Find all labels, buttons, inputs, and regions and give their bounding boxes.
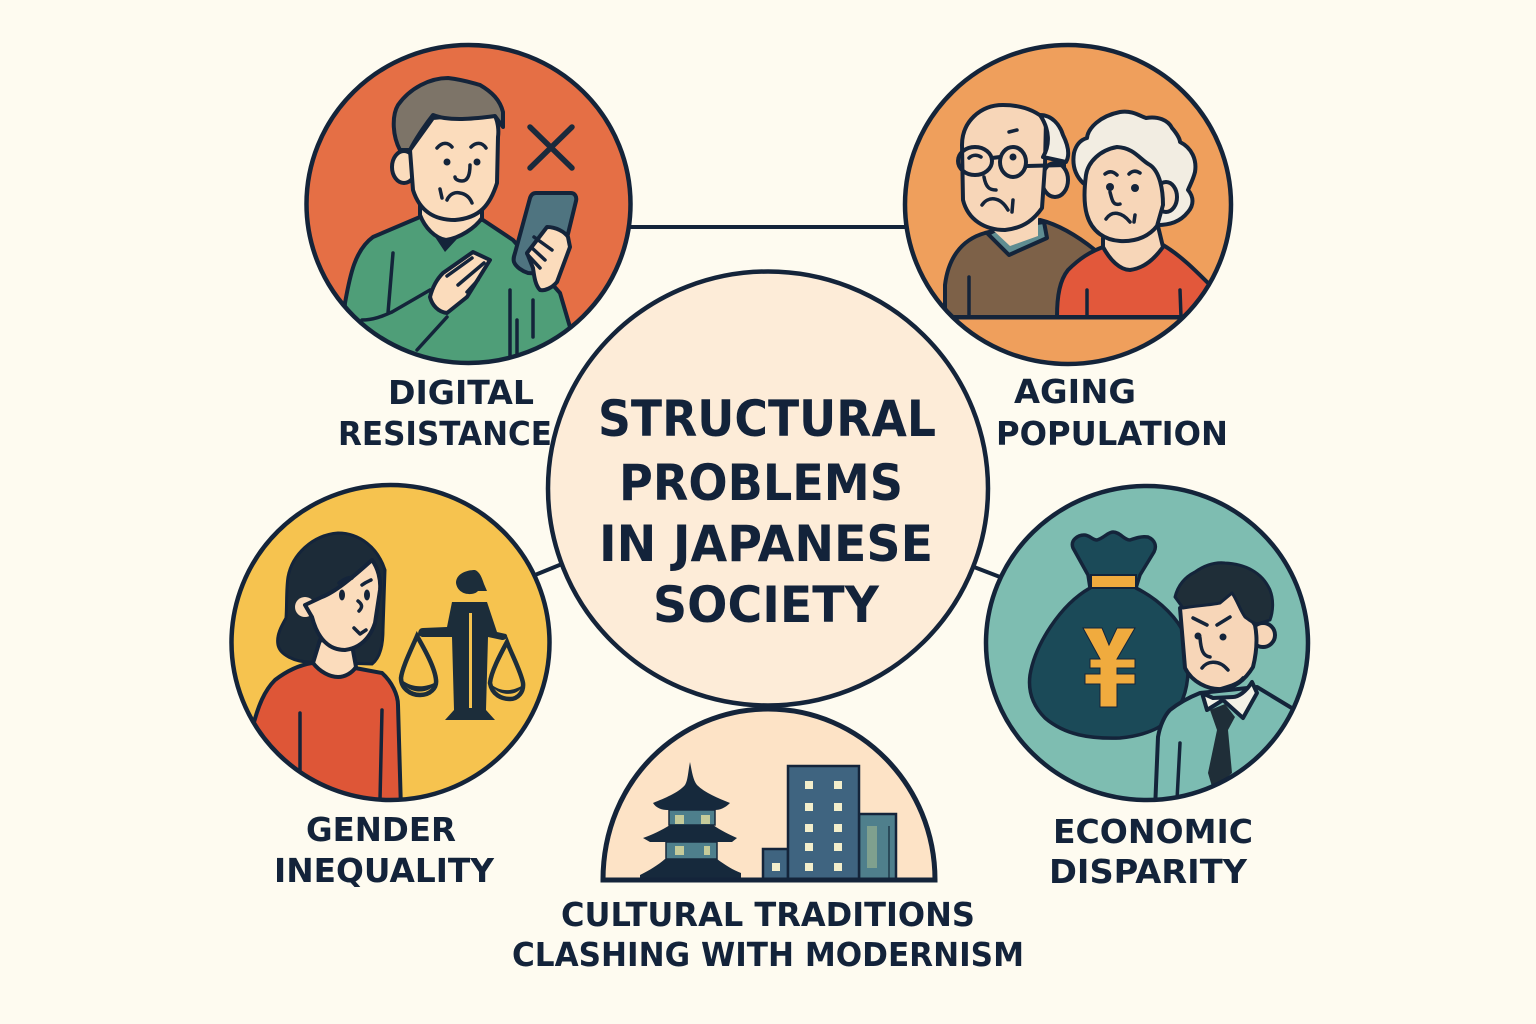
label: digital resistance [338, 373, 552, 453]
icon: money bag [1030, 532, 1188, 738]
icon: man's ear [392, 151, 416, 183]
icon: pagoda [640, 762, 741, 880]
icon: small building [763, 849, 788, 880]
title: PROBLEMS [619, 454, 903, 512]
icon: white collar [1202, 682, 1257, 718]
icon: old woman's face [1085, 147, 1163, 241]
icon: old man's head [962, 105, 1046, 230]
icon: yen sign [1083, 628, 1135, 707]
label: cultural traditions: CLASHING WITH MODERNISM [512, 935, 1024, 974]
panel: gender inequality icon [232, 485, 550, 810]
icon: scales of justice figure [418, 570, 507, 720]
label: gender inequality: INEQUALITY [274, 851, 495, 890]
label: digital resistance: DIGITAL [388, 373, 534, 412]
panel: central circle [548, 272, 988, 706]
panel: aging population icon [905, 45, 1231, 364]
icon: woman's face [305, 560, 380, 650]
icon: right scale pan [490, 642, 523, 699]
icon: shirt fold [1177, 743, 1180, 800]
label: aging population: AGING [1014, 372, 1136, 411]
label: aging population [996, 372, 1228, 453]
icon: man's hair [1175, 563, 1273, 624]
panel: economic disparity icon [986, 486, 1310, 810]
label: aging population: POPULATION [996, 414, 1228, 453]
label: cultural traditions: CULTURAL TRADITIONS [561, 895, 975, 934]
icon: old woman's sweater [1057, 245, 1215, 317]
icon: old woman's hair [1073, 112, 1195, 225]
icon: old woman's neck [1103, 222, 1163, 270]
icon: bag tie [1091, 575, 1136, 588]
icon: man's ear [1251, 623, 1275, 647]
icon: necktie [1208, 704, 1235, 790]
title [598, 390, 936, 634]
icon: woman's sweater [253, 663, 403, 798]
icon: green sweater [343, 216, 572, 361]
icon: sweater folds [300, 710, 382, 800]
panel: digital resistance icon [306, 45, 630, 380]
label: digital resistance: RESISTANCE [338, 414, 552, 453]
icon: sweater folds [969, 277, 1181, 317]
icon: man's face [1180, 590, 1256, 689]
icon: smartphone [514, 193, 576, 275]
icon: woman's neck [313, 640, 356, 677]
icon: holding hand [527, 227, 570, 290]
icon: dark undershirt [435, 237, 457, 252]
icon: glasses [958, 147, 1066, 177]
label: economic disparity [1049, 812, 1253, 891]
title: SOCIETY [653, 576, 880, 634]
label: economic disparity: DISPARITY [1049, 852, 1248, 891]
icon: old man's collar [988, 222, 1047, 255]
connector lines [535, 227, 1000, 577]
icon: man's face [410, 112, 498, 220]
label: economic disparity: ECONOMIC [1053, 812, 1253, 851]
label: cultural traditions [512, 895, 1024, 974]
icon: man's shirt [1155, 687, 1310, 810]
icon: old woman's ear [1162, 180, 1179, 214]
icon: old man's hair [1040, 115, 1068, 162]
icon: old man's ear [1042, 163, 1068, 197]
icon: sweater folds [362, 253, 533, 360]
icon: X mark [530, 127, 572, 168]
icon: old man's neck [993, 215, 1038, 246]
icon: tall building with windows [788, 766, 859, 880]
icon: man's hair [394, 78, 503, 150]
icon: right building [859, 814, 896, 880]
icon: left scale pan [401, 636, 436, 695]
icon: table line [958, 319, 1178, 320]
panel: cultural traditions icon [601, 709, 937, 880]
label: gender inequality: GENDER [306, 810, 456, 849]
icon: old man's sweater [945, 220, 1100, 317]
title: IN JAPANESE [599, 515, 933, 573]
title: STRUCTURAL [598, 390, 936, 448]
icon: woman's ear [295, 597, 312, 617]
icon: neck [420, 205, 482, 240]
icon: woman's hair [278, 533, 385, 664]
label: gender inequality [274, 810, 495, 890]
icon: chest hand [430, 252, 490, 313]
